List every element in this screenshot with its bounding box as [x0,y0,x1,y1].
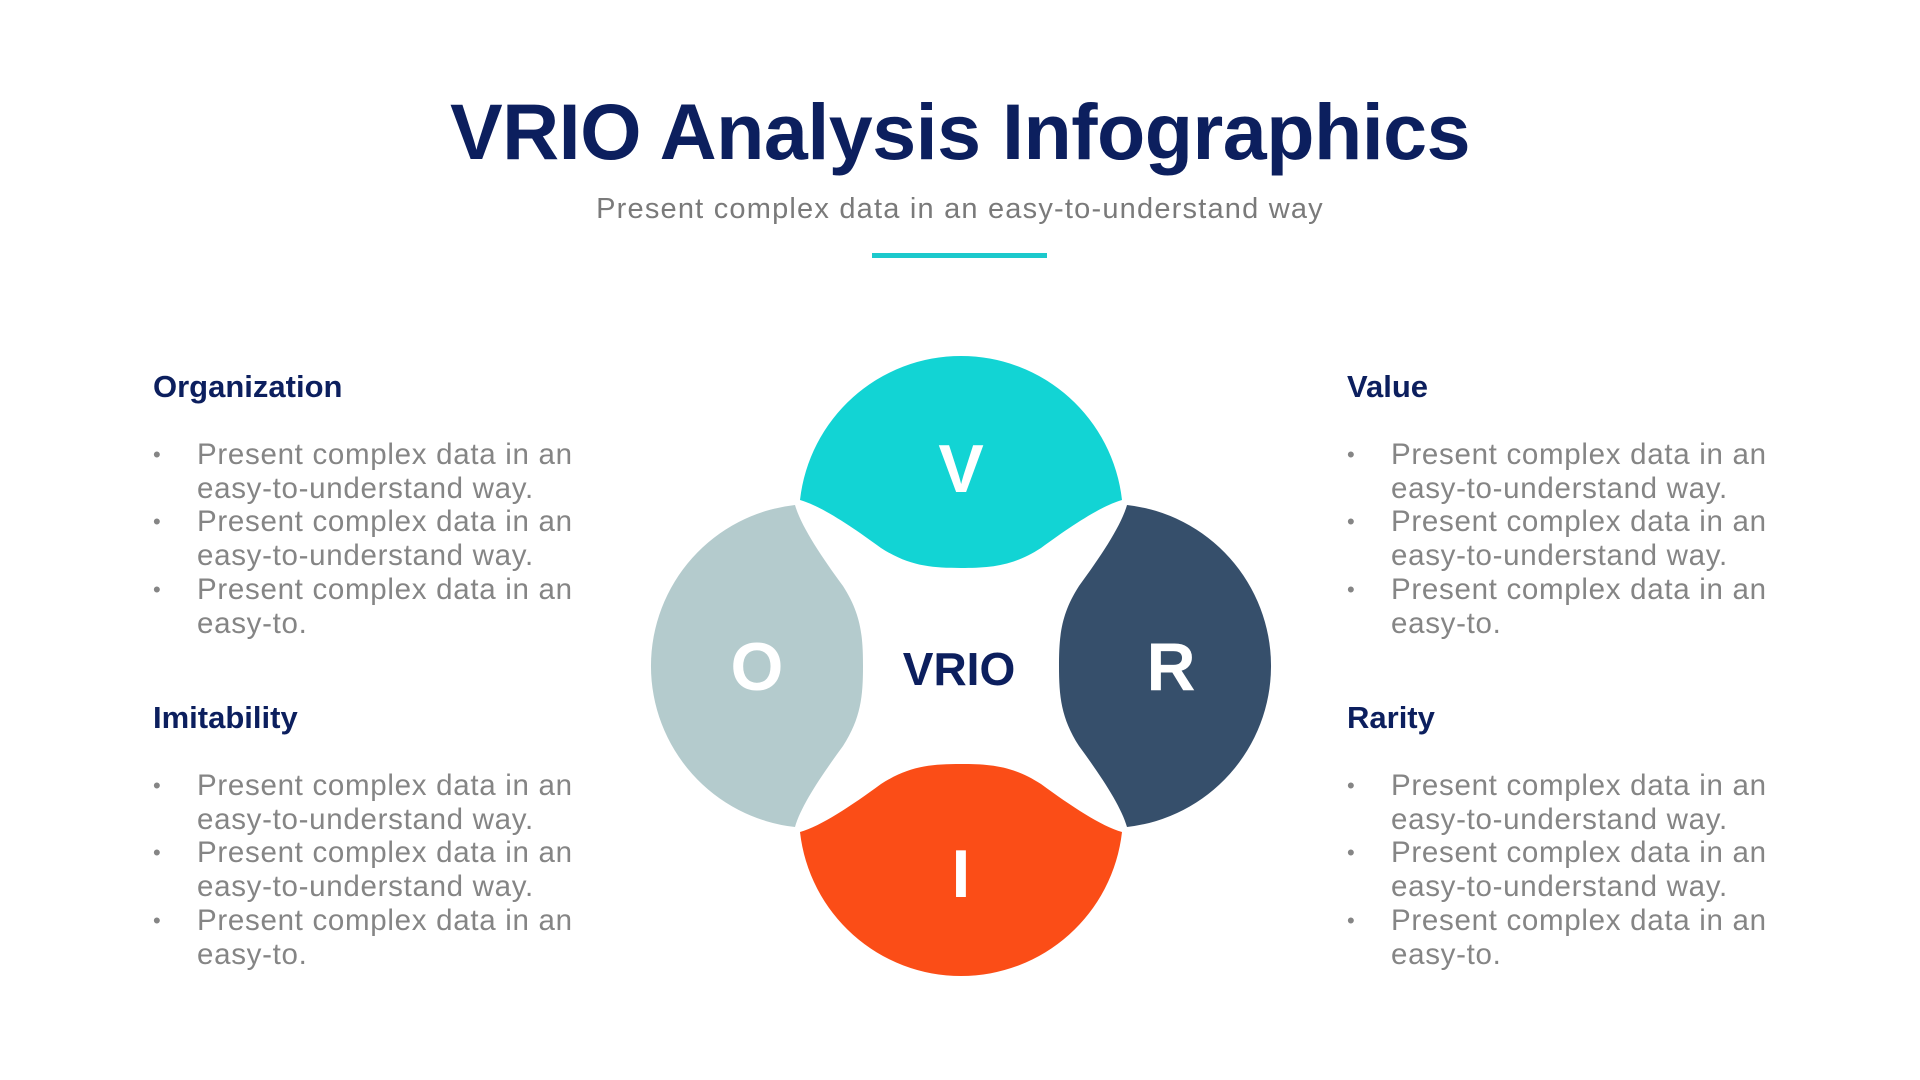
bullets: rarity: easy-to-understand way. [1391,803,1728,836]
panel: value [1347,369,1767,640]
bullets: rarity: easy-to-understand way. [1391,870,1728,903]
bullets: imitability: Present complex data in an [197,904,573,937]
petal: I [800,764,1122,976]
title: VRIO Analysis Infographics [450,87,1470,176]
bullets: rarity: easy-to. [1391,938,1502,971]
petal: I: I [952,836,970,912]
bullets: imitability: easy-to. [197,938,308,971]
heading: rarity: Rarity [1347,700,1435,735]
bullets: rarity: Present complex data in an [1391,904,1767,937]
bullets: organization: easy-to-understand way. [197,539,534,572]
accent underline [872,253,1047,258]
bullets: rarity [1348,769,1767,971]
heading: value: Value [1347,369,1428,404]
bullets: imitability: easy-to-understand way. [197,803,534,836]
bullets: value: easy-to. [1391,607,1502,640]
bullets: organization: Present complex data in an [197,438,573,471]
petal: V: V [938,431,984,507]
heading: imitability: Imitability [153,700,298,735]
petal: O [651,505,863,827]
bullets: imitability [154,769,573,971]
bullets: rarity: Present complex data in an [1391,836,1767,869]
bullets: value: Present complex data in an [1391,573,1767,606]
bullets: imitability: Present complex data in an [197,769,573,802]
bullets: organization: easy-to-understand way. [197,472,534,505]
petal: V [800,356,1122,568]
petal: R [1059,505,1271,827]
bullets: organization: Present complex data in an [197,505,573,538]
panel: organization [153,369,573,640]
bullets: imitability: Present complex data in an [197,836,573,869]
subtitle: Present complex data in an easy-to-understand way [596,193,1324,225]
petal: O: O [731,629,783,705]
petal: R: R [1146,629,1196,705]
heading: organization: Organization [153,369,342,404]
bullets: rarity: Present complex data in an [1391,769,1767,802]
bullets: value: Present complex data in an [1391,505,1767,538]
bullets: imitability: easy-to-understand way. [197,870,534,903]
bullets: value [1348,438,1767,640]
panel: rarity [1347,700,1767,971]
bullets: organization: Present complex data in an [197,573,573,606]
panel: imitability [153,700,573,971]
bullets: organization: easy-to. [197,607,308,640]
bullets: value: Present complex data in an [1391,438,1767,471]
bullets: value: easy-to-understand way. [1391,539,1728,572]
bullets: value: easy-to-understand way. [1391,472,1728,505]
center label: VRIO [903,643,1015,695]
bullets: organization [154,438,573,640]
